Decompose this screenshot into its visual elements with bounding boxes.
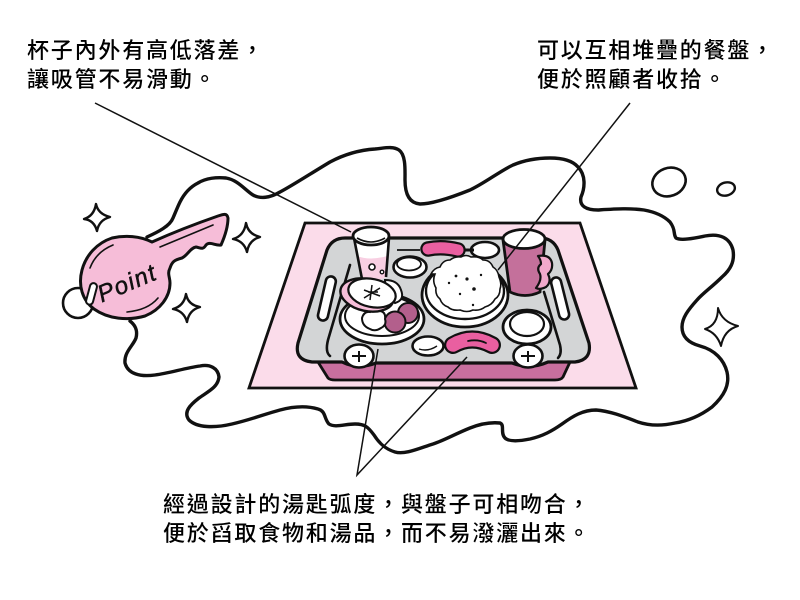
sausage slices <box>398 303 418 323</box>
pointer lines: spoon curve <box>357 349 467 475</box>
key body <box>80 214 228 319</box>
callout: stacking plates: 便於照顧者收拾。 <box>537 67 727 92</box>
tray base <box>318 362 570 380</box>
left screw <box>344 344 374 368</box>
callout: spoon curve <box>163 492 591 546</box>
right handle <box>550 276 570 321</box>
tray inner rim right <box>544 292 561 358</box>
key text: Point <box>94 259 161 308</box>
rice bowl <box>422 256 508 327</box>
glass <box>353 227 389 281</box>
mug <box>503 230 552 296</box>
fruit and sausage bowl <box>337 274 424 344</box>
callout: spoon curve: 便於舀取食物和湯品，而不易潑灑出來。 <box>163 521 591 546</box>
left handle <box>317 275 337 322</box>
pear slice <box>337 274 397 316</box>
key ring <box>63 288 93 318</box>
callout: cup: 讓吸管不易滑動。 <box>27 67 217 92</box>
callout: spoon curve: 經過設計的湯匙弧度，與盤子可相吻合， <box>163 492 591 517</box>
tray top <box>297 238 589 366</box>
bubble: large <box>648 163 690 201</box>
key slot <box>85 282 98 305</box>
callout: stacking plates: 可以互相堆疊的餐盤， <box>537 38 775 63</box>
callout: cup <box>27 38 265 92</box>
pointer line: stacking plates <box>498 103 630 270</box>
tray inner rim left <box>327 265 350 356</box>
callout: cup: 杯子內外有高低落差， <box>27 38 265 63</box>
small right plate <box>503 310 551 344</box>
key with Point label <box>63 214 228 319</box>
key highlight lines <box>90 225 213 312</box>
wavy blob outline <box>125 148 733 453</box>
cauliflower <box>362 309 386 330</box>
callout: stacking plates <box>537 38 775 92</box>
table mat <box>249 223 636 388</box>
right screw <box>514 344 542 368</box>
tray <box>297 238 589 380</box>
bottom curved spoon <box>412 336 492 356</box>
top spoon <box>397 242 499 258</box>
sparkle: top left <box>84 204 110 231</box>
sparkle: near key tip <box>233 223 260 252</box>
small top plate <box>394 256 426 278</box>
sparkle: right <box>705 308 738 346</box>
bubble: small <box>716 180 736 198</box>
pointer line: cup <box>95 103 351 232</box>
sparkle: under key <box>173 294 200 322</box>
